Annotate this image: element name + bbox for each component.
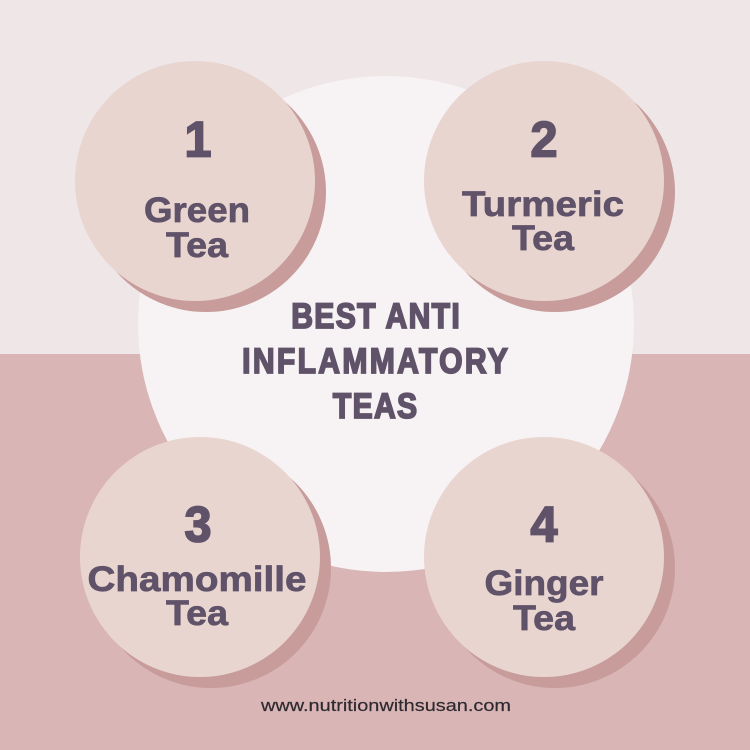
item 4: ginger tea: Tea xyxy=(513,599,576,638)
item 2: turmeric tea xyxy=(424,61,675,312)
item 4: ginger tea: Ginger xyxy=(484,564,604,603)
title: TEAS xyxy=(333,386,417,426)
item 3: chamomille tea: Chamomille xyxy=(88,560,306,599)
title xyxy=(242,296,508,426)
item 4: ginger tea: 4 xyxy=(530,496,558,552)
title: INFLAMMATORY xyxy=(242,341,508,381)
item 1: green tea: 1 xyxy=(184,112,212,168)
item 3: chamomille tea: 3 xyxy=(184,496,212,552)
title: BEST ANTI xyxy=(291,296,460,336)
item 1: green tea xyxy=(75,61,326,312)
item 1: green tea: Green xyxy=(144,191,250,230)
item 4: ginger tea xyxy=(424,437,675,688)
item 2: turmeric tea: Tea xyxy=(512,219,575,258)
item 1: green tea: Tea xyxy=(166,226,229,265)
website url: www.nutritionwithsusan.com xyxy=(260,696,511,715)
item 3: chamomille tea xyxy=(80,437,331,688)
central circle xyxy=(138,76,634,572)
item 2: turmeric tea: 2 xyxy=(530,112,558,168)
item 2: turmeric tea: Turmeric xyxy=(462,185,624,224)
item 3: chamomille tea: Tea xyxy=(166,594,229,633)
